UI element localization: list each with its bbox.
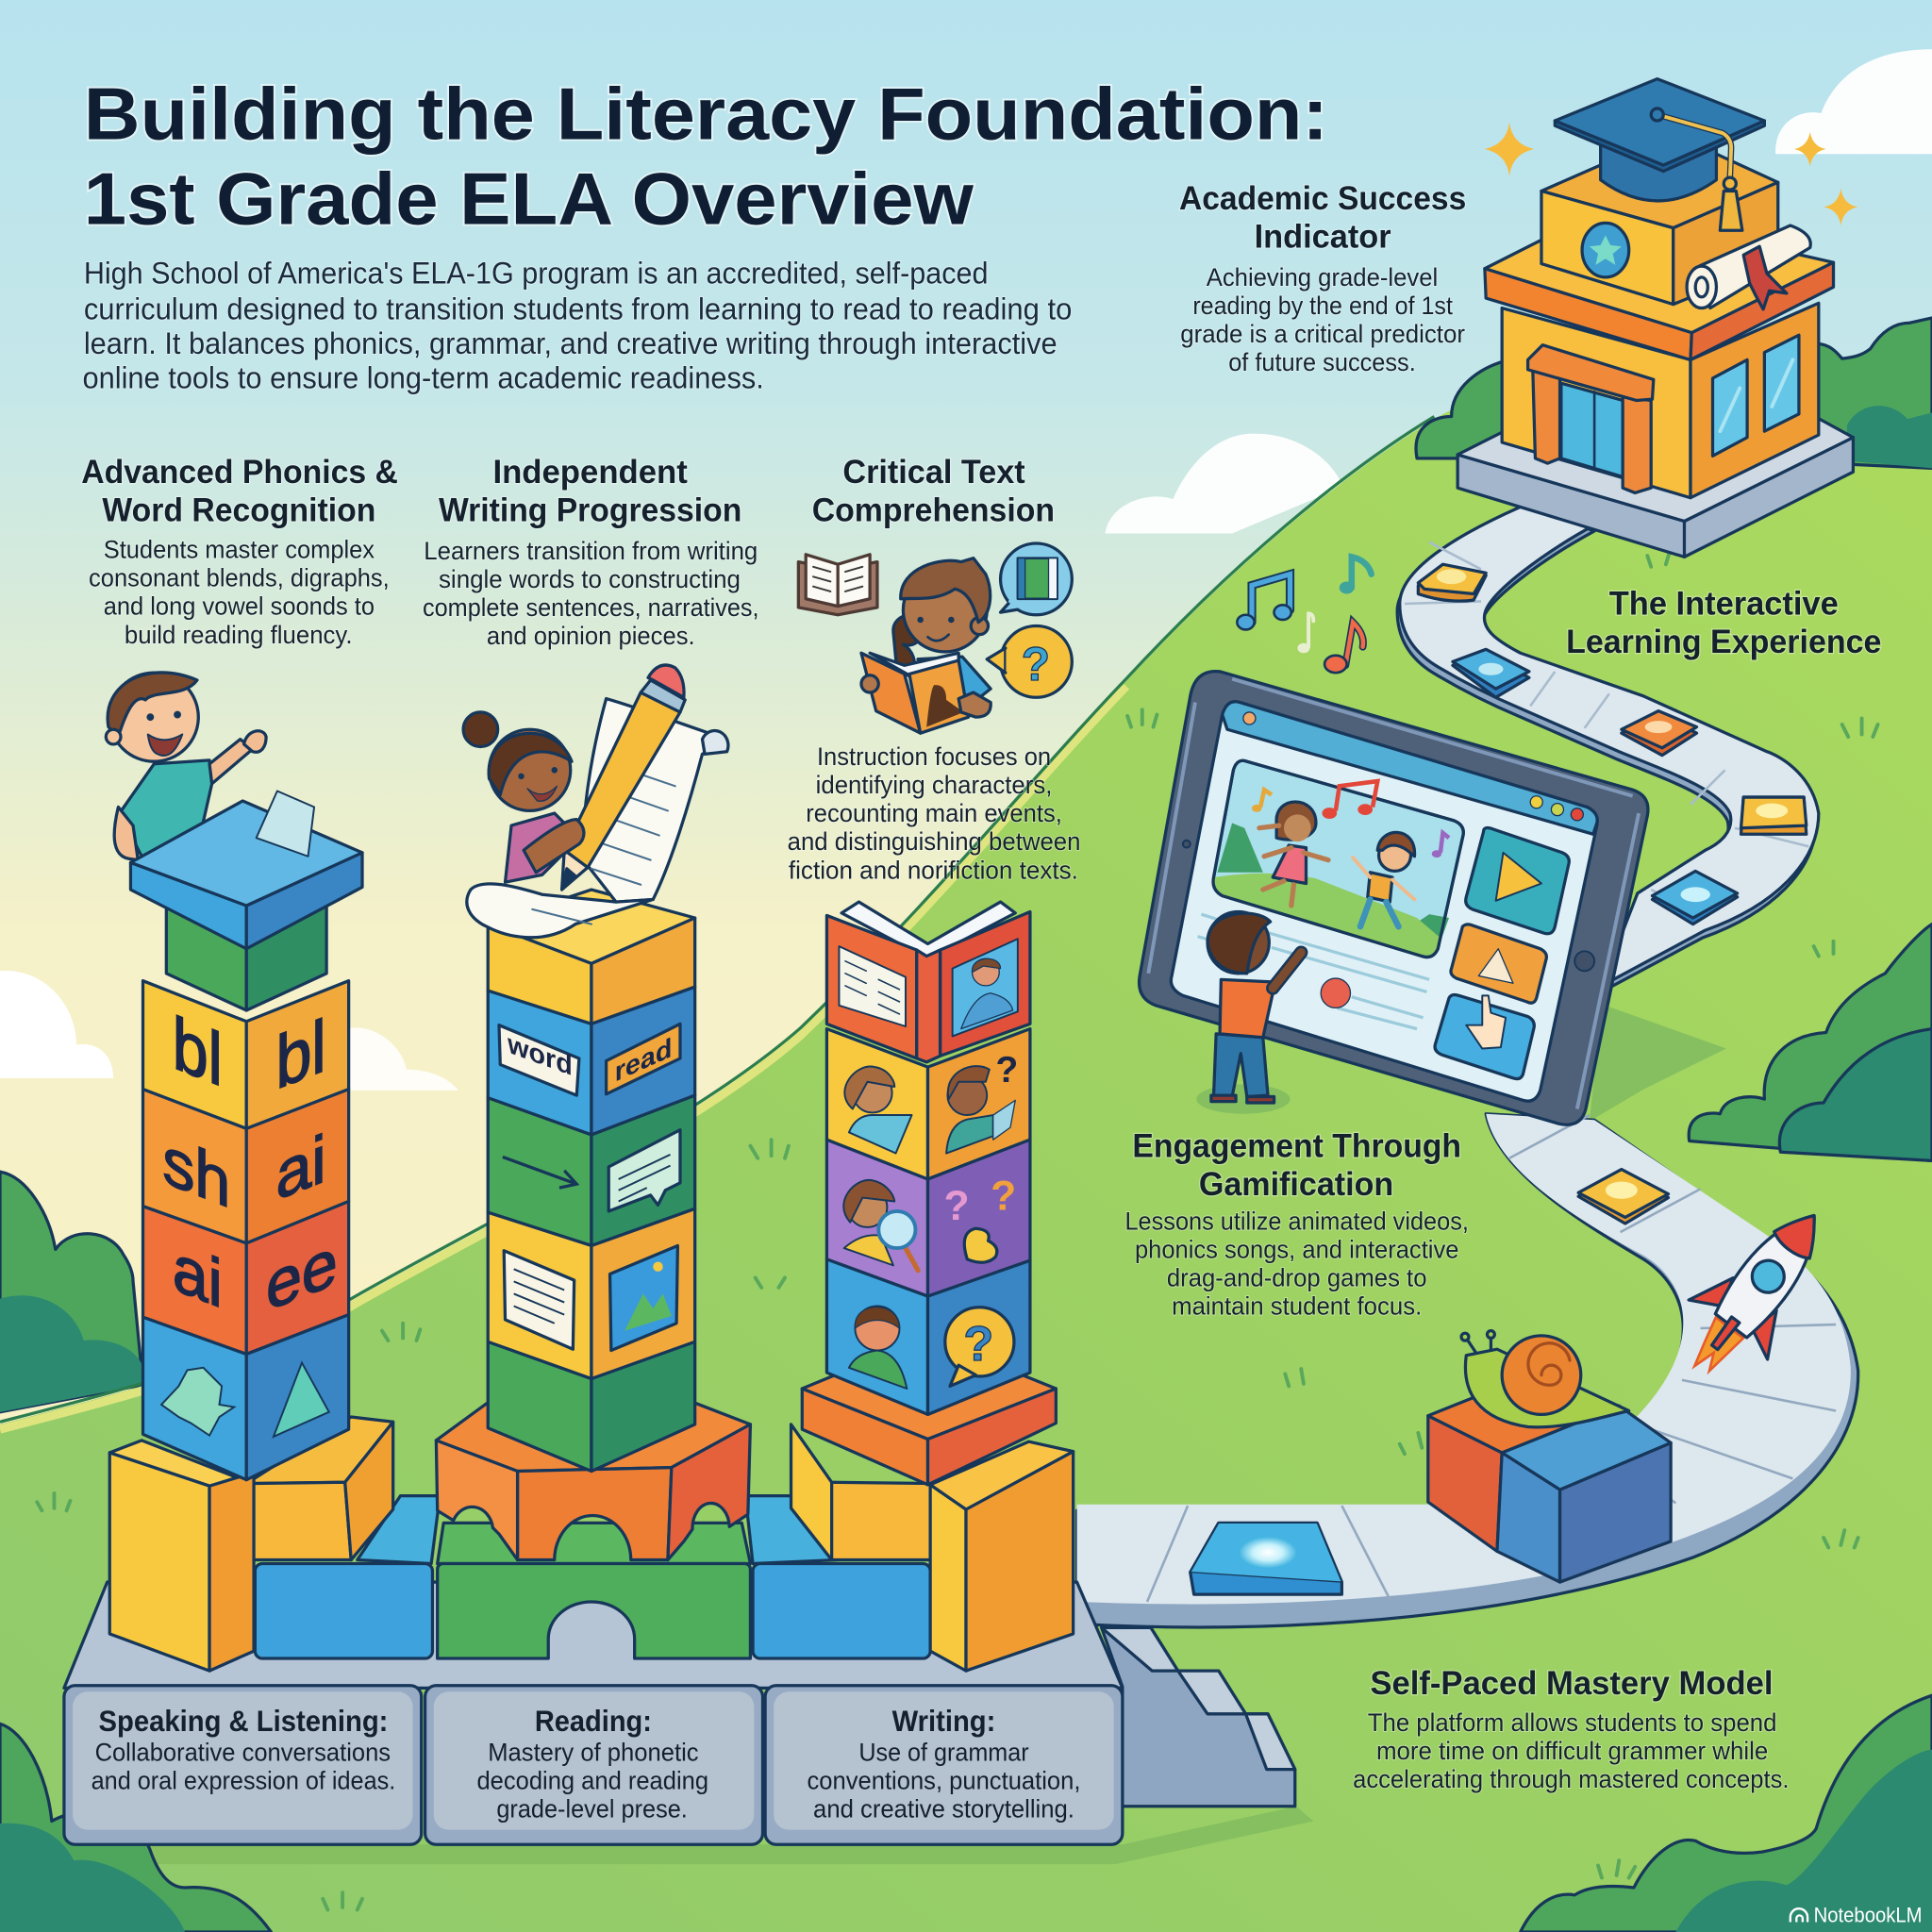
blue capstone xyxy=(130,791,362,949)
picture book xyxy=(610,1245,677,1351)
block letters: bl xyxy=(276,1005,325,1106)
heading: Advanced Phonics & xyxy=(81,454,398,491)
graduation cap xyxy=(1555,79,1764,230)
text: self-paced mastery xyxy=(1353,1665,1789,1793)
door and awning xyxy=(1528,345,1654,492)
text: critical comprehension xyxy=(788,454,1080,884)
orange slab xyxy=(802,1337,1056,1485)
heading: Engagement Through xyxy=(1132,1127,1461,1164)
arrow xyxy=(503,1157,576,1188)
heading: Comprehension xyxy=(812,491,1055,528)
book bubble icon xyxy=(1001,543,1072,615)
heading: Self-Paced Mastery Model xyxy=(1370,1665,1774,1702)
upper block xyxy=(1541,154,1778,305)
bush bottom right xyxy=(1521,1695,1932,1932)
heading: interactive learning experience: The Interactive xyxy=(1609,586,1839,623)
game tiles xyxy=(1191,564,1807,1594)
purple block question marks xyxy=(943,1174,1016,1229)
block shapes xyxy=(161,1363,329,1437)
description xyxy=(788,742,1080,884)
stone steps xyxy=(1102,1627,1295,1807)
description: complete sentences, narratives, xyxy=(423,593,759,622)
red record button xyxy=(1321,978,1351,1008)
description: Instruction focuses on xyxy=(817,742,1051,771)
duck icon xyxy=(964,1228,997,1262)
title xyxy=(84,73,1328,241)
shape block xyxy=(143,1315,349,1480)
play button xyxy=(1466,828,1569,934)
left yellow stack xyxy=(246,1417,393,1484)
pencil xyxy=(562,665,685,890)
description: grade is a critical predictor xyxy=(1180,320,1465,348)
cube with snail xyxy=(1428,1331,1671,1582)
read label xyxy=(607,1024,680,1094)
panel: reading: grade-level prese. xyxy=(496,1795,688,1824)
description: consonant blends, digraphs, xyxy=(89,564,390,592)
description: more time on difficult grammer while xyxy=(1376,1737,1768,1765)
reader block xyxy=(826,1259,1030,1414)
block letters: ai xyxy=(276,1121,325,1215)
description: The platform allows students to spend xyxy=(1368,1708,1776,1737)
hand tap button xyxy=(1435,994,1534,1079)
description: and distinguishing between xyxy=(788,827,1080,856)
text: gamification xyxy=(1124,1127,1469,1321)
orange roof xyxy=(1485,209,1834,359)
hill shading xyxy=(148,1004,1726,1864)
description xyxy=(89,536,390,649)
panel: speaking and listening xyxy=(64,1686,422,1844)
panel: writing: Use of grammar xyxy=(858,1738,1029,1766)
block letters: ee xyxy=(266,1224,338,1326)
tower 1: phonics blocks xyxy=(106,673,362,1480)
heading: Independent xyxy=(492,454,688,491)
description: and opinion pieces. xyxy=(487,622,695,650)
description xyxy=(1124,1208,1469,1321)
intro paragraph: High School of America's ELA-1G program is an accredited, self-paced xyxy=(84,256,989,290)
grass tufts xyxy=(37,552,1878,1909)
speech bubble xyxy=(608,1130,680,1211)
word read block xyxy=(488,987,695,1135)
comprehension icons xyxy=(798,543,1072,733)
windows xyxy=(1713,335,1799,456)
description xyxy=(1180,263,1465,376)
text lines on screen xyxy=(1198,914,1429,1029)
clipboard note xyxy=(504,1251,575,1349)
bl block xyxy=(143,981,349,1128)
panel: speaking and listening: Collaborative conversations xyxy=(95,1738,391,1766)
purple block question marks: ? xyxy=(991,1174,1016,1220)
description: drag-and-drop games to xyxy=(1167,1264,1426,1292)
intro paragraph: online tools to ensure long-term academic readiness. xyxy=(83,360,764,394)
intro paragraph xyxy=(83,256,1072,394)
description: Achieving grade-level xyxy=(1207,263,1438,291)
description: and long vowel soonds to xyxy=(104,592,375,621)
description: Lessons utilize animated videos, xyxy=(1124,1208,1469,1236)
description: accelerating through mastered concepts. xyxy=(1353,1765,1789,1793)
panel: writing: Writing: xyxy=(892,1705,995,1738)
word label: word xyxy=(507,1028,573,1082)
description xyxy=(423,537,759,650)
heading: Indicator xyxy=(1255,219,1391,256)
panel: reading: Mastery of phonetic xyxy=(488,1738,699,1766)
magnifying block xyxy=(826,1140,1030,1296)
intro paragraph: learn. It balances phonics, grammar, and creative writing through interactive xyxy=(84,326,1058,360)
screen music notes xyxy=(1252,781,1449,858)
stone foundation xyxy=(64,1582,1295,1844)
description: single words to constructing xyxy=(439,565,741,593)
winding path upper xyxy=(1397,502,1819,993)
heading xyxy=(81,454,398,528)
tablet screen xyxy=(1171,702,1597,1101)
panel: speaking and listening: and oral expression of ideas. xyxy=(92,1766,395,1794)
tablet frame xyxy=(1140,672,1648,1124)
stone slab xyxy=(1457,382,1853,557)
description: Learners transition from writing xyxy=(424,537,758,565)
child on tower 1 xyxy=(106,673,266,860)
panel: writing xyxy=(765,1686,1123,1844)
heading: Gamification xyxy=(1199,1166,1393,1203)
description: phonics songs, and interactive xyxy=(1135,1236,1458,1264)
green bottom block xyxy=(488,1341,695,1472)
right yellow stack xyxy=(791,1424,832,1560)
snail xyxy=(1461,1331,1629,1427)
orange arch block xyxy=(436,1404,750,1560)
base building blocks xyxy=(109,1417,1074,1671)
ai ee block xyxy=(143,1201,349,1354)
clouds xyxy=(0,49,1932,1091)
description: identifying characters, xyxy=(816,771,1052,799)
heading xyxy=(1132,1127,1461,1203)
listening block xyxy=(826,1029,1030,1179)
description: fiction and norifiction texts. xyxy=(789,856,1078,884)
paper scroll xyxy=(467,699,728,938)
book top xyxy=(826,902,1030,1062)
comprehension icons: ? xyxy=(1022,638,1050,691)
heading: interactive learning experience xyxy=(1566,586,1881,660)
school building on hill xyxy=(1457,79,1853,557)
heading: Critical Text xyxy=(842,454,1025,491)
block letters: sh xyxy=(162,1122,230,1223)
heading xyxy=(812,454,1055,528)
document block xyxy=(488,1208,695,1379)
child writing xyxy=(463,712,579,882)
text: independent writing xyxy=(423,454,759,650)
port buttons xyxy=(1183,841,1594,971)
panel: reading: Reading: xyxy=(535,1705,652,1738)
bush bottom left xyxy=(0,1724,271,1932)
description: Students master complex xyxy=(104,536,375,564)
heading: interactive learning experience: Learning Experience xyxy=(1566,624,1881,660)
description: reading by the end of 1st xyxy=(1192,291,1453,320)
block letters xyxy=(162,1002,338,1326)
arrow block xyxy=(488,1095,695,1245)
heading xyxy=(439,454,741,528)
browser bar xyxy=(1223,702,1597,834)
panel: reading: decoding and reading xyxy=(476,1766,708,1794)
block letters: ai xyxy=(173,1229,223,1324)
purple block question marks: ? xyxy=(943,1183,970,1229)
panel: writing: and creative storytelling. xyxy=(813,1795,1074,1824)
description: maintain student focus. xyxy=(1172,1292,1422,1321)
block letters: bl xyxy=(173,1002,223,1103)
green block under cap xyxy=(166,893,326,1010)
hand on pencil xyxy=(524,820,584,873)
tablet xyxy=(1140,672,1648,1124)
sparkles xyxy=(1485,122,1858,225)
bush left xyxy=(0,1172,143,1412)
heading: Writing Progression xyxy=(439,491,741,528)
panel: speaking and listening: Speaking & Listening: xyxy=(98,1705,388,1738)
rocket xyxy=(1659,1186,1854,1399)
diploma xyxy=(1687,225,1810,309)
description xyxy=(1353,1708,1789,1793)
heading xyxy=(1179,180,1466,256)
music notes xyxy=(1237,557,1372,673)
word label xyxy=(499,1025,579,1095)
child reading xyxy=(861,558,991,733)
question bubble icon xyxy=(987,626,1072,697)
tower 3: comprehension blocks: ? xyxy=(963,1317,993,1372)
window dots xyxy=(1243,712,1583,821)
video kids xyxy=(1259,802,1415,926)
open book icon xyxy=(798,555,877,615)
read label: read xyxy=(615,1033,672,1088)
text: academic success xyxy=(1179,180,1466,376)
winding path lower xyxy=(1077,1114,1858,1627)
description: build reading fluency. xyxy=(125,621,353,649)
bush behind school xyxy=(1416,318,1932,468)
title: Building the Literacy Foundation: xyxy=(84,73,1328,156)
child at tablet xyxy=(1208,912,1301,1103)
video panel xyxy=(1213,760,1463,958)
panel: reading xyxy=(425,1686,762,1844)
description: of future success. xyxy=(1228,348,1416,376)
panel: writing: conventions, punctuation, xyxy=(808,1766,1080,1794)
sh ai block xyxy=(143,1090,349,1243)
heading: Academic Success xyxy=(1179,180,1466,217)
orange game button xyxy=(1451,924,1546,1003)
tower 3: comprehension blocks: ? xyxy=(995,1050,1018,1091)
foundation top xyxy=(64,1582,1123,1688)
heading: Word Recognition xyxy=(102,491,375,528)
top yellow block xyxy=(488,890,695,1024)
bush right xyxy=(1689,924,1932,1160)
text: advanced phonics xyxy=(81,454,398,649)
description: recounting main events, xyxy=(806,799,1062,827)
intro paragraph: curriculum designed to transition students from learning to read to reading to xyxy=(84,291,1072,325)
tower 3: comprehension blocks xyxy=(802,902,1056,1485)
notebooklm watermark: NotebookLM xyxy=(1814,1904,1923,1927)
slow cube xyxy=(1428,1391,1671,1582)
title: 1st Grade ELA Overview xyxy=(84,158,974,241)
walls xyxy=(1502,303,1819,498)
